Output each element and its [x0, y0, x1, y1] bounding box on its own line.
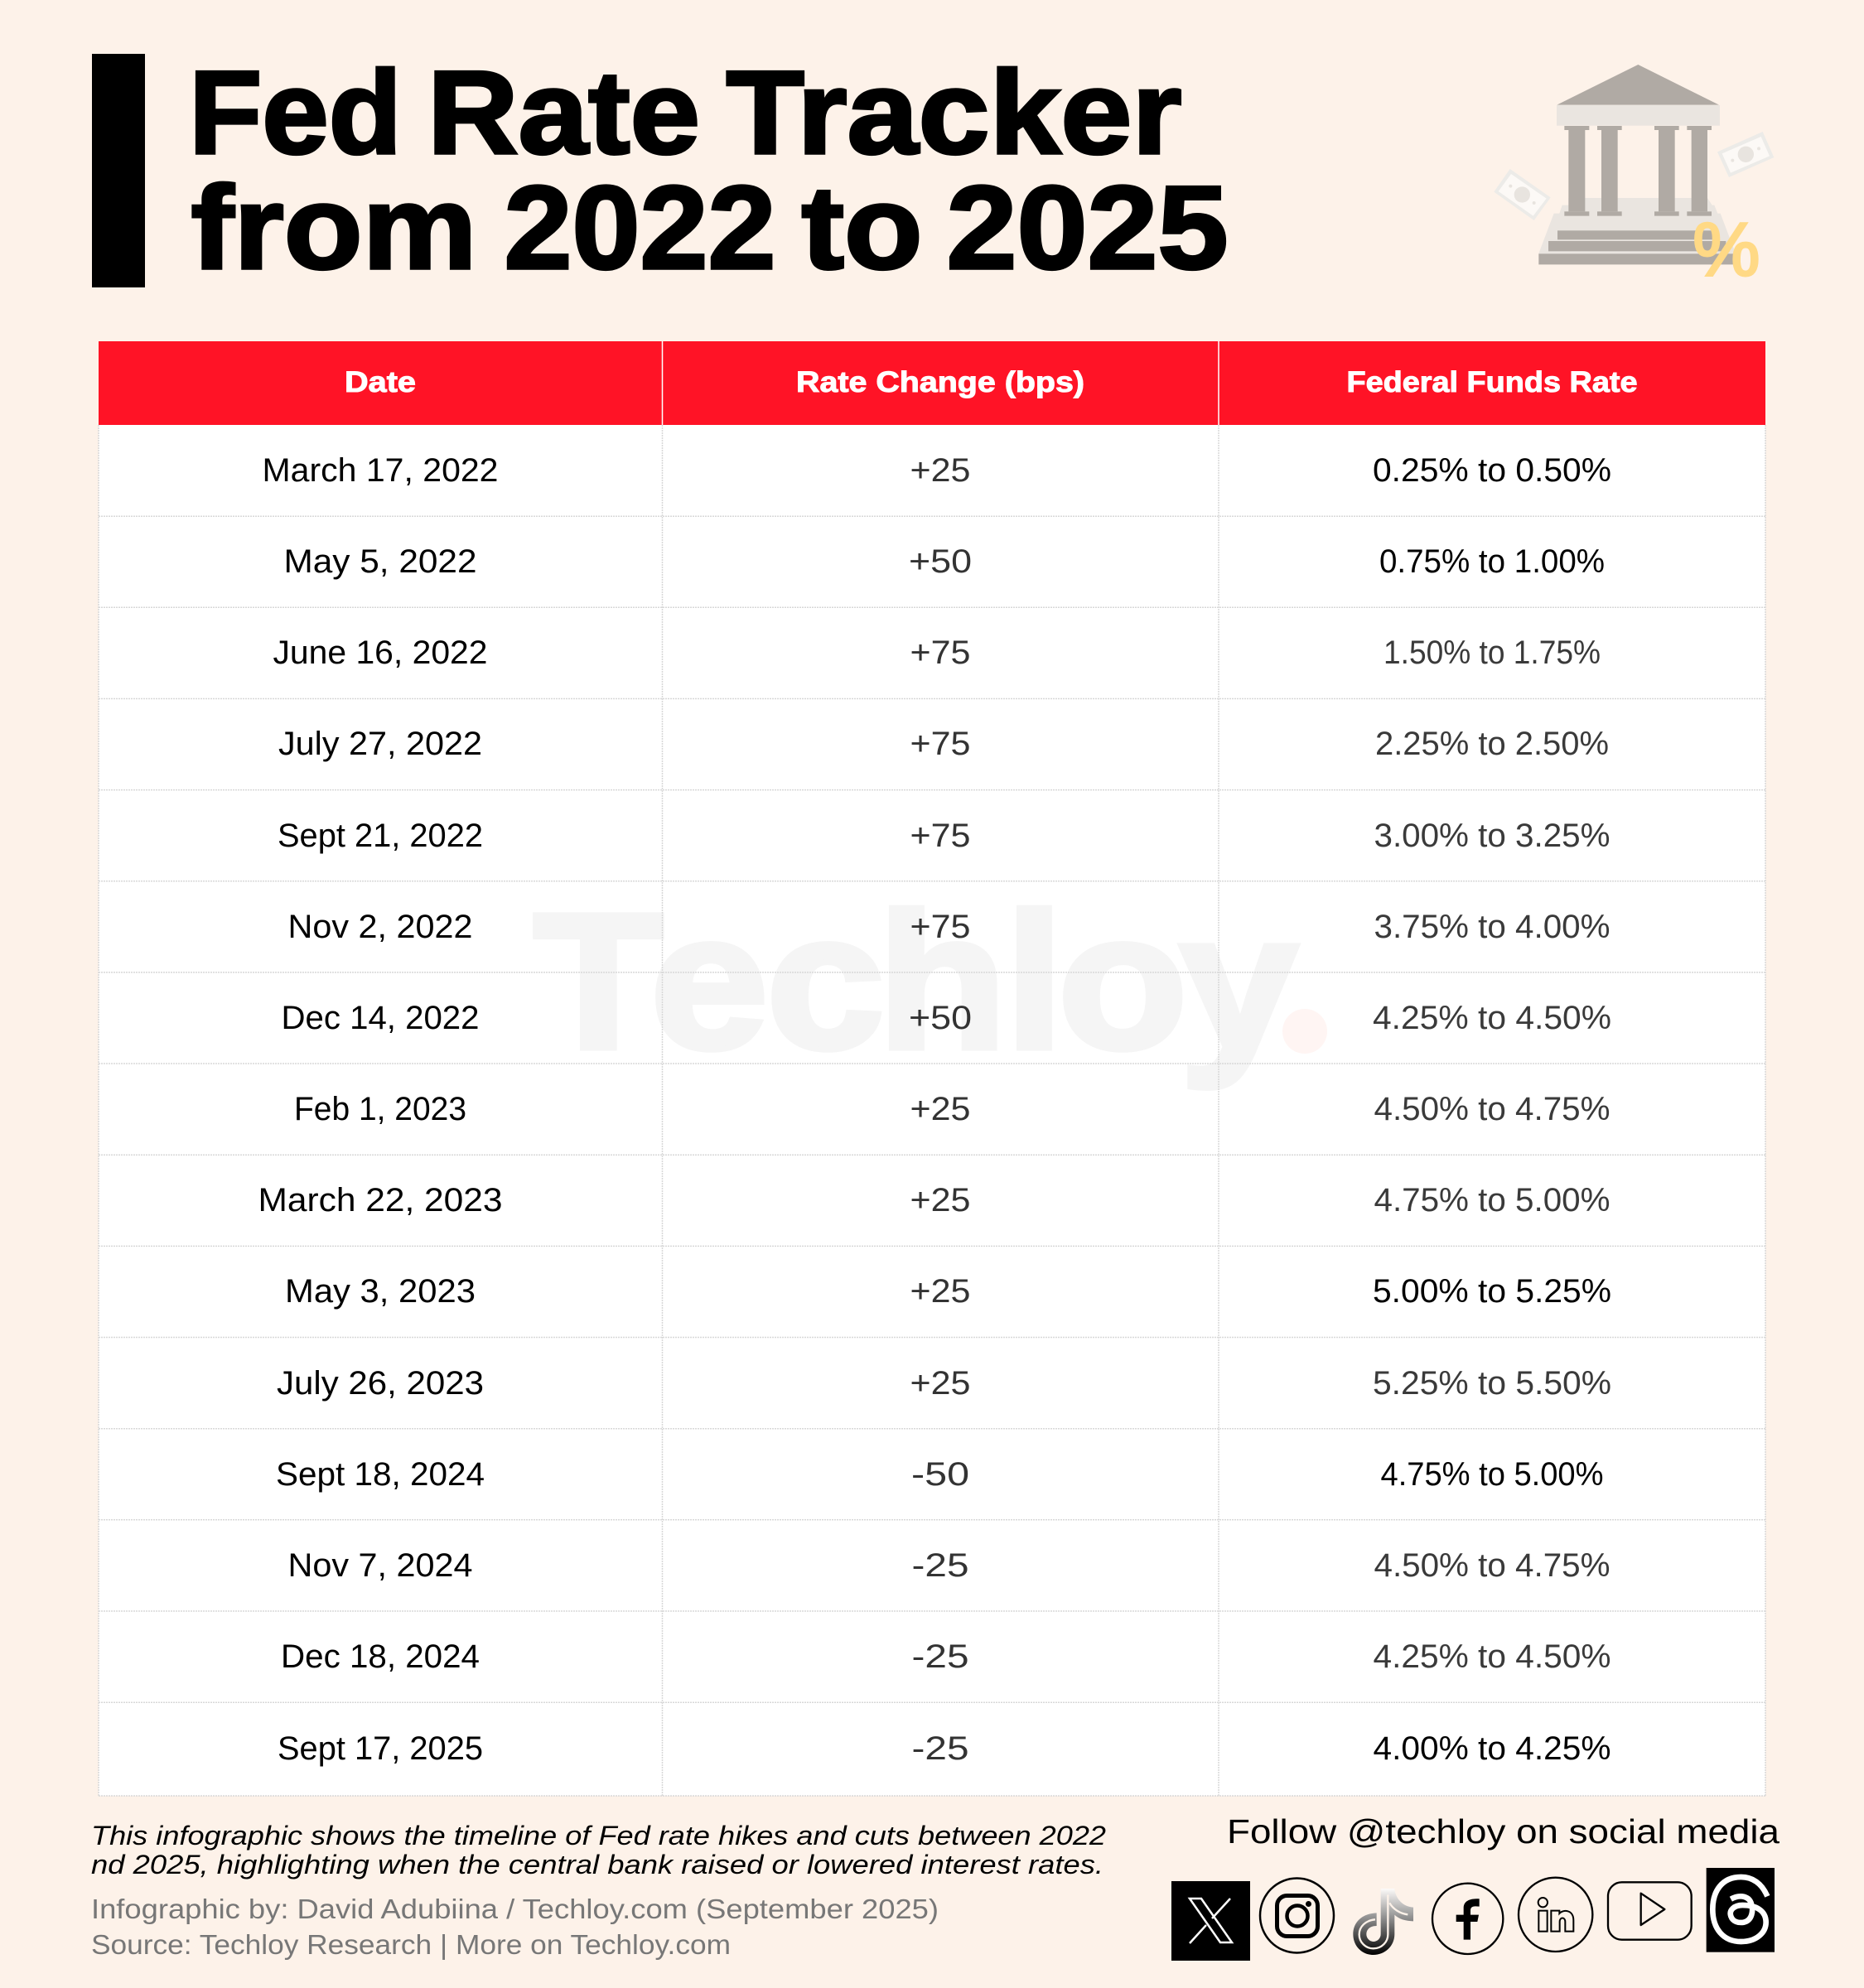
row: Sept 18, 2024: Sept 18, 2024: [276, 1456, 485, 1493]
row: Dec 18, 2024: -25: [911, 1638, 969, 1675]
row: May 5, 2022: 0.75% to 1.00%: [1379, 543, 1605, 580]
row: May 3, 2023: 5.00% to 5.25%: [1373, 1273, 1611, 1310]
row: June 16, 2022: 1.50% to 1.75%: [1384, 635, 1601, 671]
row: Sept 21, 2022: +75: [910, 818, 971, 854]
title: Tracker: [726, 47, 1181, 179]
title: Fed: [189, 47, 402, 179]
row: March 22, 2023: 4.75% to 5.00%: [1374, 1182, 1610, 1218]
footer description: [91, 1821, 1106, 1879]
row: Nov 2, 2022: Nov 2, 2022: [288, 909, 472, 945]
table header row: Rate Change (bps): [796, 366, 1084, 398]
follow heading: Follow @techloy on social media: [1227, 1812, 1779, 1850]
row: Dec 18, 2024: 4.25% to 4.50%: [1374, 1638, 1610, 1675]
row: Dec 18, 2024: [281, 1638, 1610, 1675]
row: July 27, 2022: July 27, 2022: [278, 726, 482, 762]
row: Dec 14, 2022: 4.25% to 4.50%: [1373, 1000, 1611, 1036]
title: from: [191, 162, 477, 294]
icon: TikTok: [1353, 1889, 1413, 1955]
icon: YouTube: [1608, 1882, 1692, 1940]
row: March 22, 2023: [258, 1182, 1610, 1218]
row: July 26, 2023: 5.25% to 5.50%: [1373, 1365, 1611, 1402]
row: Sept 18, 2024: 4.75% to 5.00%: [1380, 1456, 1604, 1493]
row: March 22, 2023: +25: [910, 1182, 971, 1218]
row: Dec 14, 2022: [282, 1000, 1611, 1036]
table panel: [99, 341, 1765, 1796]
row: Feb 1, 2023: 4.50% to 4.75%: [1374, 1091, 1610, 1127]
row: Sept 17, 2025: 4.00% to 4.25%: [1374, 1730, 1610, 1767]
icon: central bank building with money and percent: %: [1693, 209, 1760, 292]
table header row: Date: [345, 366, 416, 398]
row: Sept 21, 2022: 3.00% to 3.25%: [1374, 818, 1610, 854]
row: July 26, 2023: [277, 1365, 1611, 1402]
row: July 27, 2022: +75: [910, 726, 971, 762]
title: Rate: [427, 47, 700, 179]
row: June 16, 2022: +75: [910, 635, 971, 671]
row: Nov 7, 2024: Nov 7, 2024: [288, 1547, 472, 1584]
icon: Instagram: [1260, 1879, 1334, 1953]
row: May 5, 2022: [283, 543, 1605, 580]
table header row: [99, 341, 1765, 425]
icon: Facebook: [1432, 1884, 1503, 1954]
row: May 5, 2022: +50: [909, 543, 972, 580]
row: Sept 18, 2024: -50: [911, 1456, 969, 1493]
icon: LinkedIn: [1519, 1878, 1592, 1952]
row: Dec 18, 2024: Dec 18, 2024: [281, 1638, 480, 1675]
title: 2025: [946, 162, 1228, 294]
footer description: nd 2025, highlighting when the central bank raised or lowered interest rates.: [91, 1850, 1103, 1879]
row: Dec 14, 2022: Dec 14, 2022: [282, 1000, 479, 1036]
row: July 26, 2023: July 26, 2023: [277, 1365, 484, 1402]
footer credits: [91, 1894, 939, 1960]
row: Nov 2, 2022: +75: [910, 909, 971, 945]
row: Nov 7, 2024: -25: [911, 1547, 969, 1584]
row: June 16, 2022: June 16, 2022: [273, 635, 487, 671]
row: March 22, 2023: March 22, 2023: [258, 1182, 502, 1218]
row: Nov 2, 2022: 3.75% to 4.00%: [1374, 909, 1610, 945]
icon: central bank building with money and percent: [1494, 65, 1774, 292]
row: Sept 17, 2025: -25: [911, 1730, 969, 1767]
row: May 5, 2022: May 5, 2022: [283, 543, 477, 580]
footer credits: Infographic by: David Adubiina / Techloy.com (September 2025): [91, 1894, 939, 1924]
row: May 3, 2023: +25: [910, 1273, 971, 1310]
table body background: [99, 341, 1765, 1796]
row: Feb 1, 2023: +25: [910, 1091, 971, 1127]
icon: Threads: [1707, 1868, 1775, 1952]
title: [189, 47, 1228, 294]
row: Feb 1, 2023: [294, 1091, 1610, 1127]
footer description: This infographic shows the timeline of Fed rate hikes and cuts between 2022: [91, 1821, 1106, 1850]
row: Sept 21, 2022: Sept 21, 2022: [278, 818, 483, 854]
row: March 17, 2022: 0.25% to 0.50%: [1373, 452, 1611, 489]
footer credits: Source: Techloy Research | More on Techloy.com: [91, 1929, 731, 1960]
row: May 3, 2023: [285, 1273, 1611, 1310]
row: May 3, 2023: May 3, 2023: [285, 1273, 476, 1310]
title: to: [802, 162, 923, 294]
watermark: Techloy: Techloy: [534, 873, 1297, 1088]
row: Feb 1, 2023: Feb 1, 2023: [294, 1091, 466, 1127]
table header row: Federal Funds Rate: [1347, 366, 1637, 398]
icon: X: [1171, 1881, 1250, 1961]
row: March 17, 2022: March 17, 2022: [262, 452, 499, 489]
row: Nov 7, 2024: 4.50% to 4.75%: [1374, 1547, 1610, 1584]
row: Sept 17, 2025: Sept 17, 2025: [278, 1730, 483, 1767]
row: July 27, 2022: 2.25% to 2.50%: [1375, 726, 1609, 762]
row: July 27, 2022: [278, 726, 1609, 762]
row: Sept 17, 2025: [278, 1730, 1610, 1767]
row: March 17, 2022: [262, 452, 1611, 489]
row: June 16, 2022: [273, 635, 1601, 671]
row: Dec 14, 2022: +50: [909, 1000, 972, 1036]
row: Sept 21, 2022: [278, 818, 1610, 854]
row: March 17, 2022: +25: [910, 452, 971, 489]
row: July 26, 2023: +25: [910, 1365, 971, 1402]
row: Nov 2, 2022: [288, 909, 1610, 945]
row: Nov 7, 2024: [288, 1547, 1610, 1584]
row: Sept 18, 2024: [276, 1456, 1604, 1493]
accent bar: [92, 54, 145, 287]
title: 2022: [504, 162, 775, 294]
